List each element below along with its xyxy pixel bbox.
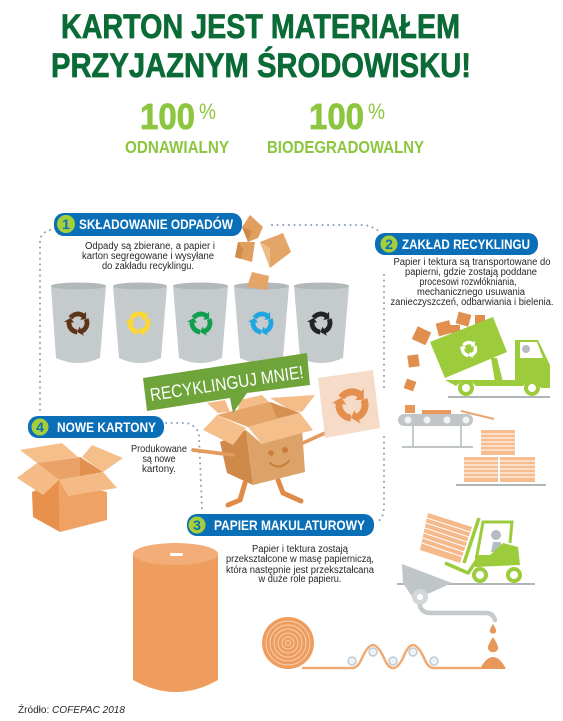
illustration: dump truck with cartons bbox=[404, 312, 550, 398]
step 2 text: papierni, gdzie zostają poddane bbox=[405, 267, 537, 278]
step 3 text: przekształcone w masę papierniczą, bbox=[226, 554, 374, 565]
step 2 heading: 2 bbox=[385, 236, 393, 252]
stat: 100% odnawialny: % bbox=[199, 99, 216, 124]
bin: blue bbox=[234, 282, 289, 363]
step 3 heading: 3 bbox=[193, 517, 201, 533]
step 4 text: kartony. bbox=[142, 464, 176, 475]
falling cartons bbox=[235, 215, 291, 290]
step 2 text bbox=[390, 257, 554, 308]
step 1 text: do zakładu recyklingu. bbox=[102, 261, 194, 272]
green speech banner bbox=[143, 353, 310, 413]
step 3 text: w duże role papieru. bbox=[258, 574, 342, 585]
step 1 heading bbox=[54, 213, 242, 236]
source: Źródło: COFEPAC 2018 bbox=[18, 703, 125, 716]
stat: 100% biodegradowalny: % bbox=[368, 99, 385, 124]
title: KARTON JEST MATERIAŁEM bbox=[61, 8, 460, 46]
stat: 100% odnawialny bbox=[125, 96, 229, 157]
bin: black bbox=[294, 282, 349, 363]
recycling sign held by mascot bbox=[318, 370, 380, 438]
bin: brown bbox=[51, 282, 106, 363]
step 2 text: zanieczyszczeń, odbarwiania i bielenia. bbox=[390, 297, 554, 308]
step 4 text bbox=[131, 444, 187, 475]
step 1 heading: 1 bbox=[62, 216, 70, 232]
arms and legs bbox=[193, 433, 325, 505]
illustration: forklift with bale bbox=[397, 513, 535, 585]
step 4 heading: NOWE KARTONY bbox=[57, 419, 157, 435]
step 2 heading: ZAKŁAD RECYKLINGU bbox=[402, 236, 530, 252]
step 1 text: karton segregowane i wysyłane bbox=[82, 251, 214, 262]
green speech banner: RECYKLINGUJ MNIE! bbox=[149, 362, 305, 405]
step 2 text: Papier i tektura są transportowane do bbox=[394, 257, 551, 268]
mascot face bbox=[268, 447, 289, 467]
step 3 heading bbox=[187, 514, 374, 536]
step 1 text bbox=[82, 241, 215, 272]
step 3 text bbox=[226, 544, 374, 585]
illustration: pulp drops bbox=[480, 624, 506, 669]
illustration: conveyor belt bbox=[398, 405, 494, 448]
step 2 text: mechanicznego usuwania bbox=[417, 287, 525, 298]
title: PRZYJAZNYM ŚRODOWISKU! bbox=[51, 47, 471, 85]
step 3 text: która następnie jest przekształcana bbox=[226, 565, 374, 576]
bin: green bbox=[173, 282, 228, 363]
carton mascot bbox=[193, 395, 325, 505]
step 1 text: Odpady są zbierane, a papier i bbox=[85, 241, 215, 252]
bin: yellow bbox=[113, 282, 167, 363]
cartons falling from truck bbox=[404, 312, 485, 391]
step 2 heading bbox=[375, 233, 538, 255]
illustration: paper machine and roll bbox=[262, 617, 482, 669]
stat: 100% odnawialny: ODNAWIALNY bbox=[125, 137, 229, 157]
stat: 100% biodegradowalny: BIODEGRADOWALNY bbox=[267, 137, 424, 157]
stat: 100% biodegradowalny bbox=[267, 96, 424, 157]
illustration: paper bale stacks bbox=[456, 430, 546, 486]
illustration: hopper and pulp pipe bbox=[402, 564, 495, 620]
title bbox=[51, 8, 471, 85]
step 1 heading: SKŁADOWANIE ODPADÓW bbox=[79, 215, 234, 232]
new carton box bbox=[17, 443, 123, 532]
step 3 heading: PAPIER MAKULATUROWY bbox=[214, 517, 366, 533]
step 2 text: procesowi rozwłókniania, bbox=[420, 277, 516, 288]
step 4 text: Produkowane bbox=[131, 444, 187, 455]
step 3 text: Papier i tektura zostają bbox=[252, 544, 348, 555]
stat: 100% biodegradowalny: 100 bbox=[309, 96, 364, 137]
step 4 heading bbox=[28, 416, 164, 438]
stat: 100% odnawialny: 100 bbox=[140, 96, 195, 137]
step 4 heading: 4 bbox=[36, 419, 44, 435]
recycling bins bbox=[51, 282, 349, 363]
dotted cycle path bbox=[40, 225, 384, 522]
step 4 text: są nowe bbox=[142, 454, 176, 465]
large paper roll bbox=[133, 543, 218, 692]
